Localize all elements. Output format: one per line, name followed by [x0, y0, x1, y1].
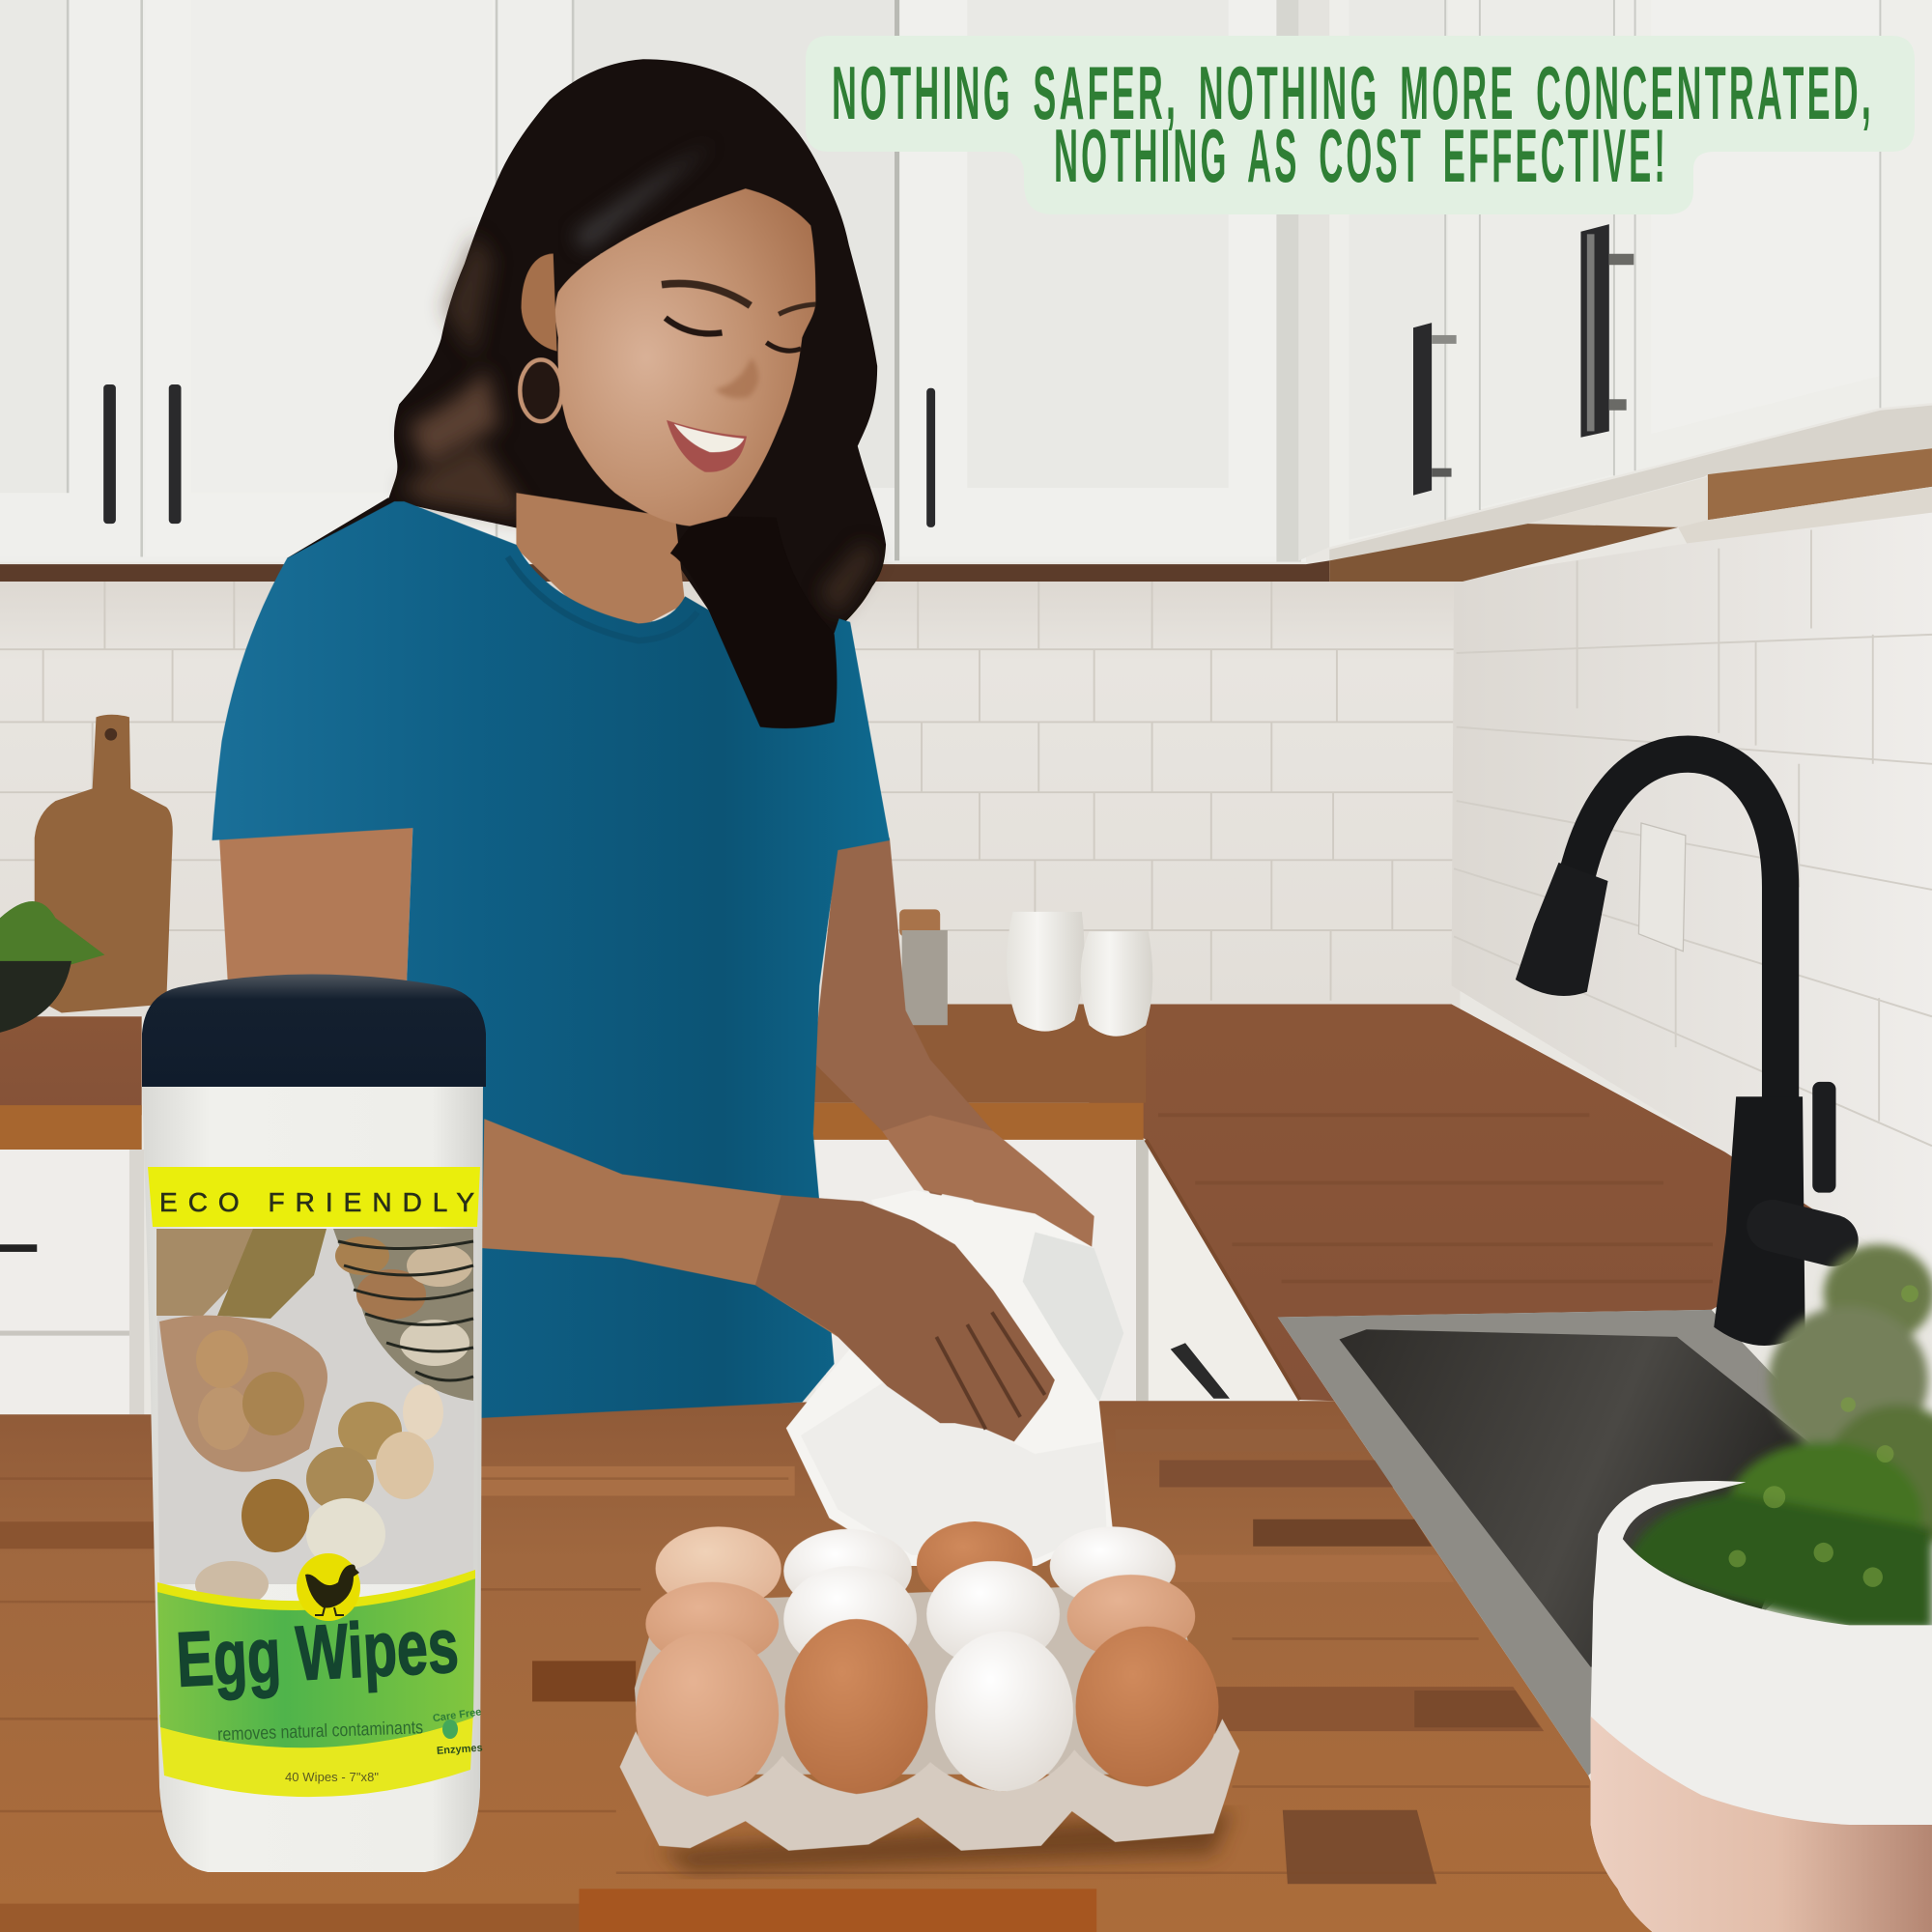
back counter left [0, 1016, 142, 1150]
canister body [142, 1080, 483, 1872]
sweater [156, 1229, 259, 1316]
tagline: removes natural contaminants [217, 1718, 423, 1746]
lower yellow band [159, 1710, 473, 1797]
eyes and brows [662, 283, 815, 351]
brown hair highlights [401, 234, 877, 616]
upper cabinets [0, 0, 1932, 582]
smile [667, 420, 747, 472]
carton shadow [659, 1811, 1233, 1873]
paper towel [786, 1190, 1123, 1566]
product canister: Egg Wipes [142, 974, 486, 1872]
care free mark: Care Free [432, 1706, 482, 1724]
ear [522, 254, 557, 352]
wire basket [333, 1229, 473, 1401]
banner shape [806, 36, 1915, 214]
egg carton [620, 1521, 1239, 1873]
white vases [1007, 912, 1152, 1037]
hand over towel [755, 1195, 1055, 1441]
wipes count: 40 Wipes - 7"x8" [285, 1770, 379, 1784]
hair back [388, 59, 886, 728]
earring [520, 359, 562, 421]
eggs [636, 1521, 1218, 1797]
care free mark: Enzymes [437, 1743, 483, 1757]
headline banner [806, 36, 1915, 214]
under cabinet wood [1329, 524, 1678, 582]
hands [159, 1316, 327, 1472]
eco friendly text: ECO FRIENDLY [159, 1187, 474, 1217]
faucet [1516, 754, 1863, 1346]
hen badge [297, 1553, 360, 1621]
carton front cups [620, 1719, 1239, 1851]
sink [1278, 1310, 1835, 1776]
grey sheen on hair [573, 142, 715, 252]
far hand [882, 1115, 1094, 1248]
eggs on label [195, 1330, 443, 1607]
forearm [482, 1119, 914, 1337]
center cabinet door [895, 0, 1301, 562]
right wall tiles [1452, 513, 1932, 1282]
yellow accent stripe [157, 1570, 475, 1610]
hair front lock [670, 516, 837, 728]
thin hair over shoulder [287, 497, 407, 562]
face [555, 188, 815, 526]
care free mark [432, 1706, 483, 1757]
shirt collar [508, 557, 697, 640]
front counter [0, 1401, 1652, 1932]
canister [899, 909, 948, 1025]
woman [212, 59, 993, 1418]
light switch plate [1638, 823, 1686, 952]
t-shirt [212, 501, 890, 1418]
lower cabinets center [815, 1140, 1300, 1417]
neck [516, 493, 685, 629]
egg wipes title: Egg Wipes [174, 1602, 461, 1703]
back counter right [813, 1005, 1848, 1401]
arm [217, 1229, 327, 1319]
carton back tray [635, 1583, 1220, 1775]
angled right cabinets [1298, 0, 1932, 562]
plant pot [1591, 1481, 1932, 1932]
top yellow band [148, 1167, 480, 1227]
underside trim [1329, 406, 1932, 562]
herb plant [1627, 1244, 1932, 1629]
arm near shoulder [219, 826, 412, 1060]
lower cabinets left [0, 1150, 144, 1414]
bowl with greens [0, 901, 104, 1033]
nose shadow [715, 357, 758, 398]
under cabinet trim [0, 560, 1329, 582]
left cabinet doors [0, 0, 899, 557]
wood block pattern [0, 1430, 1627, 1932]
back wall tiles [0, 573, 1460, 1016]
cutting board [35, 715, 173, 1012]
far arm [813, 838, 993, 1202]
label photo [156, 1229, 475, 1607]
cabinet handles [103, 224, 1634, 527]
canister lid [142, 974, 486, 1087]
green band [157, 1575, 475, 1747]
